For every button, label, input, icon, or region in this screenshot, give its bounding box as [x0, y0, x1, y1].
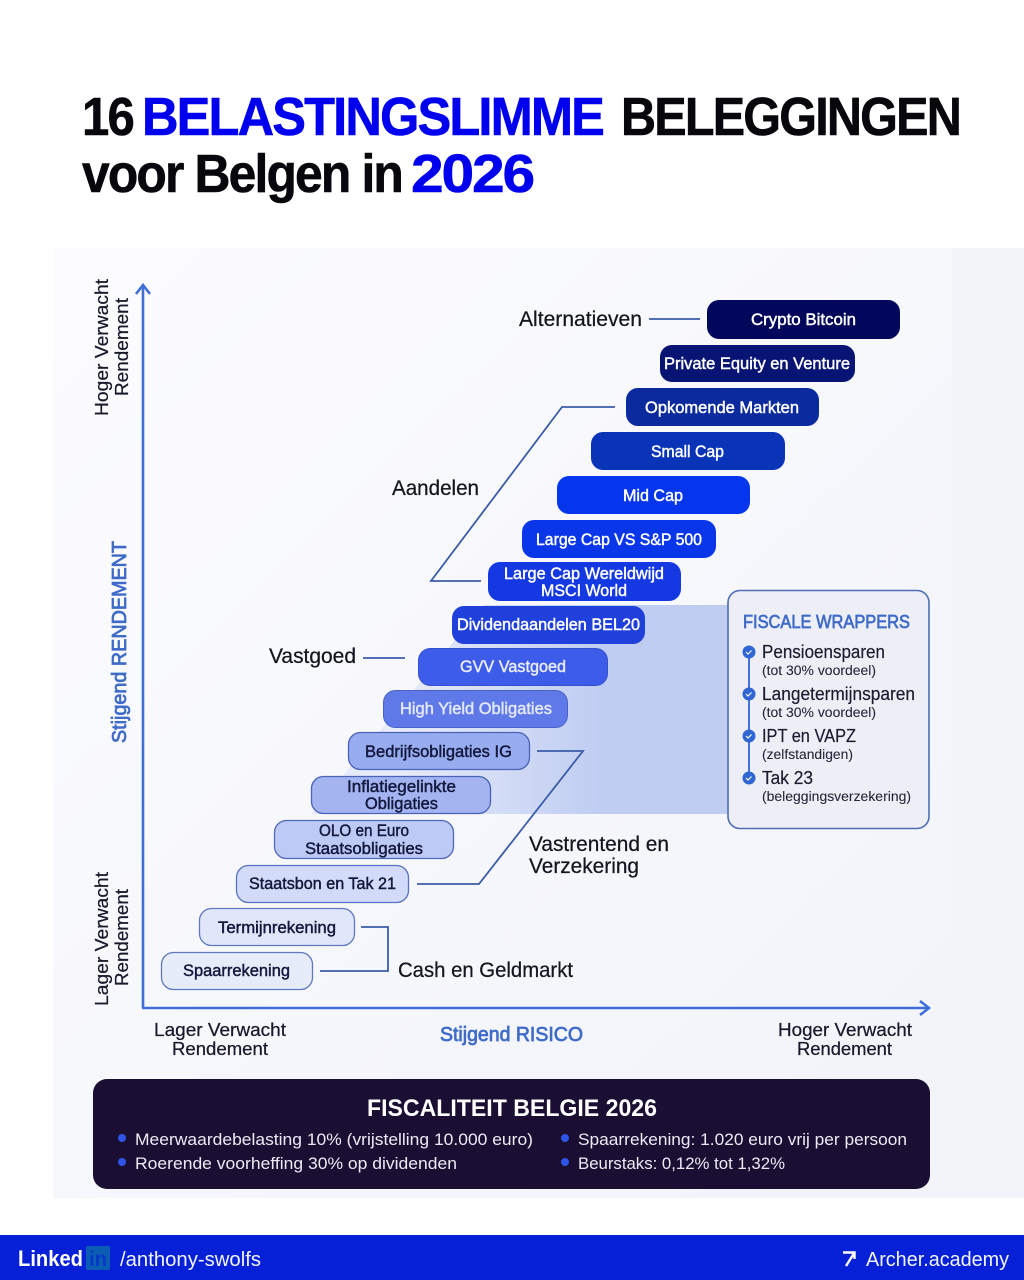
pill: Inflatiegelinkte Obligaties: Inflatiegelinkte	[347, 778, 456, 796]
linkedin logo: in	[89, 1248, 107, 1271]
bullet: meerwaardebelasting: Meerwaardebelasting 10% (vrijstelling 10.000 euro)	[135, 1130, 533, 1149]
pill: Large Cap Wereldwijd: MSCI World	[541, 582, 627, 600]
shaded band behind pills	[311, 605, 728, 814]
bullet: roerende voorheffing: Roerende voorheffing 30% op dividenden	[135, 1154, 457, 1173]
x axis label: high: Hoger Verwacht	[778, 1019, 912, 1040]
icon: arrow	[843, 1252, 854, 1266]
horizontal axis arrow	[142, 1001, 929, 1015]
item: Pensioensparen	[762, 642, 885, 678]
heading: fiscaliteit: FISCALITEIT BELGIE 2026	[367, 1095, 657, 1122]
pill: Small Cap: Small Cap	[651, 443, 724, 461]
pill: Dividendaandelen BEL20: Dividendaandelen BEL20	[457, 616, 640, 634]
item: Tak 23: (beleggingsverzekering)	[762, 789, 911, 804]
item: Tak 23: Tak 23	[762, 768, 813, 788]
pill: Opkomende Markten: Opkomende Markten	[645, 399, 799, 417]
pill: GVV Vastgoed: GVV Vastgoed	[460, 658, 566, 676]
pill: Spaarrekening	[162, 952, 312, 990]
y axis label: low: Rendement	[111, 889, 132, 986]
pill: Opkomende Markten	[626, 388, 819, 426]
timeline with check icons	[742, 646, 756, 784]
label: Vastgoed: Vastgoed	[269, 645, 356, 668]
item: Langetermijnsparen: Langetermijnsparen	[762, 684, 915, 704]
linkedin handle: /anthony-swolfs	[120, 1248, 261, 1271]
bullet: beurstaks: Beurstaks: 0,12% tot 1,32%	[578, 1154, 785, 1173]
pill: Inflatiegelinkte Obligaties: Obligaties	[365, 795, 438, 813]
pill: Bedrijfsobligaties IG: Bedrijfsobligaties IG	[365, 743, 512, 761]
item: IPT en VAPZ: IPT en VAPZ	[762, 726, 856, 746]
pill: Crypto Bitcoin: Crypto Bitcoin	[751, 311, 856, 329]
item: Tak 23	[762, 768, 911, 804]
pill: OLO en Euro Staatsobligaties: Staatsobligaties	[305, 840, 423, 858]
x axis label: high: Rendement	[797, 1038, 892, 1059]
y axis title: Stijgend RENDEMENT	[109, 541, 131, 743]
pill: Large Cap VS: Large Cap VS S&P 500	[536, 531, 702, 549]
pill: Mid Cap	[557, 476, 750, 514]
pill: Termijnrekening	[200, 908, 354, 946]
item: Langetermijnsparen: (tot 30% voordeel)	[762, 705, 876, 720]
pill: Large Cap Wereldwijd	[488, 562, 681, 601]
pill: OLO en Euro Staatsobligaties	[274, 820, 454, 858]
label: Aandelen: Aandelen	[392, 477, 479, 500]
vertical axis arrow	[136, 285, 150, 1008]
pill: Private Equity en Venture	[660, 345, 855, 382]
pill: Dividendaandelen BEL20	[452, 606, 645, 644]
y axis label: low	[91, 872, 132, 1006]
pill: Large Cap Wereldwijd: Large Cap Wereldwijd	[504, 565, 664, 583]
pill: Spaarrekening: Spaarrekening	[183, 962, 290, 980]
pill: Crypto Bitcoin	[707, 300, 900, 339]
pill: High Yield Obligaties: High Yield Obligaties	[400, 700, 552, 718]
title: 16	[82, 87, 134, 147]
panel: fiscaliteit belgie	[93, 1079, 930, 1189]
title: voor Belgen in	[82, 144, 402, 204]
pill: Staatsbon en Tak 21	[236, 866, 408, 902]
pill: Termijnrekening: Termijnrekening	[218, 919, 336, 937]
label: Vastrentend en Verzekering: Vastrentend en	[529, 833, 669, 856]
x axis title: Stijgend RISICO	[440, 1024, 583, 1046]
label: Cash en Geldmarkt: Cash en Geldmarkt	[398, 959, 573, 982]
label: Cash en Geldmarkt	[320, 927, 573, 982]
y axis label: high	[91, 279, 132, 416]
title: BELASTINGSLIMME	[142, 87, 603, 147]
pill: GVV Vastgoed	[418, 648, 608, 686]
x axis label: low: Rendement	[172, 1038, 268, 1059]
panel: fiscale wrappers	[728, 590, 929, 828]
heading: fiscale wrappers: FISCALE WRAPPERS	[743, 611, 910, 632]
x axis label: high	[778, 1019, 912, 1059]
brand name: Archer.academy	[866, 1248, 1010, 1271]
pill: High Yield Obligaties	[384, 690, 568, 728]
pill: Staatsbon en Tak 21: Staatsbon en Tak 21	[249, 875, 396, 893]
title	[82, 87, 960, 204]
footer bar	[0, 1235, 1024, 1280]
pill: Inflatiegelinkte Obligaties	[312, 776, 490, 814]
x axis label: low: Lager Verwacht	[154, 1019, 286, 1040]
item: Pensioensparen: (tot 30% voordeel)	[762, 663, 876, 678]
x axis label: low	[154, 1019, 286, 1059]
label: Vastrentend en Verzekering	[417, 751, 669, 884]
title: BELEGGINGEN	[621, 87, 960, 147]
item: IPT en VAPZ	[762, 726, 856, 762]
bullet: spaarrekening: Spaarrekening: 1.020 euro vrij per persoon	[578, 1130, 907, 1149]
label: Vastgoed	[269, 645, 405, 668]
pill: Large Cap VS	[522, 520, 716, 558]
item: Pensioensparen: Pensioensparen	[762, 642, 885, 662]
y axis label: high: Hoger Verwacht	[91, 279, 112, 416]
pill: Bedrijfsobligaties IG	[348, 732, 530, 770]
label: Alternatieven: Alternatieven	[519, 308, 642, 331]
linkedin logo: Linked	[18, 1246, 83, 1271]
pill: Private Equity en Venture: Private Equity en Venture	[664, 355, 850, 373]
item: IPT en VAPZ: (zelfstandigen)	[762, 747, 853, 762]
y axis label: low: Lager Verwacht	[91, 872, 112, 1006]
y axis label: high: Rendement	[111, 298, 132, 396]
pill: Mid Cap: Mid Cap	[623, 487, 683, 505]
item: Langetermijnsparen	[762, 684, 915, 720]
label: Aandelen	[392, 407, 615, 581]
pill: Small Cap	[591, 432, 785, 470]
panel: chart background	[53, 248, 1024, 1198]
title: 2026	[411, 144, 534, 204]
pill: OLO en Euro Staatsobligaties: OLO en Euro	[319, 822, 409, 840]
label: Vastrentend en Verzekering: Verzekering	[529, 855, 639, 878]
